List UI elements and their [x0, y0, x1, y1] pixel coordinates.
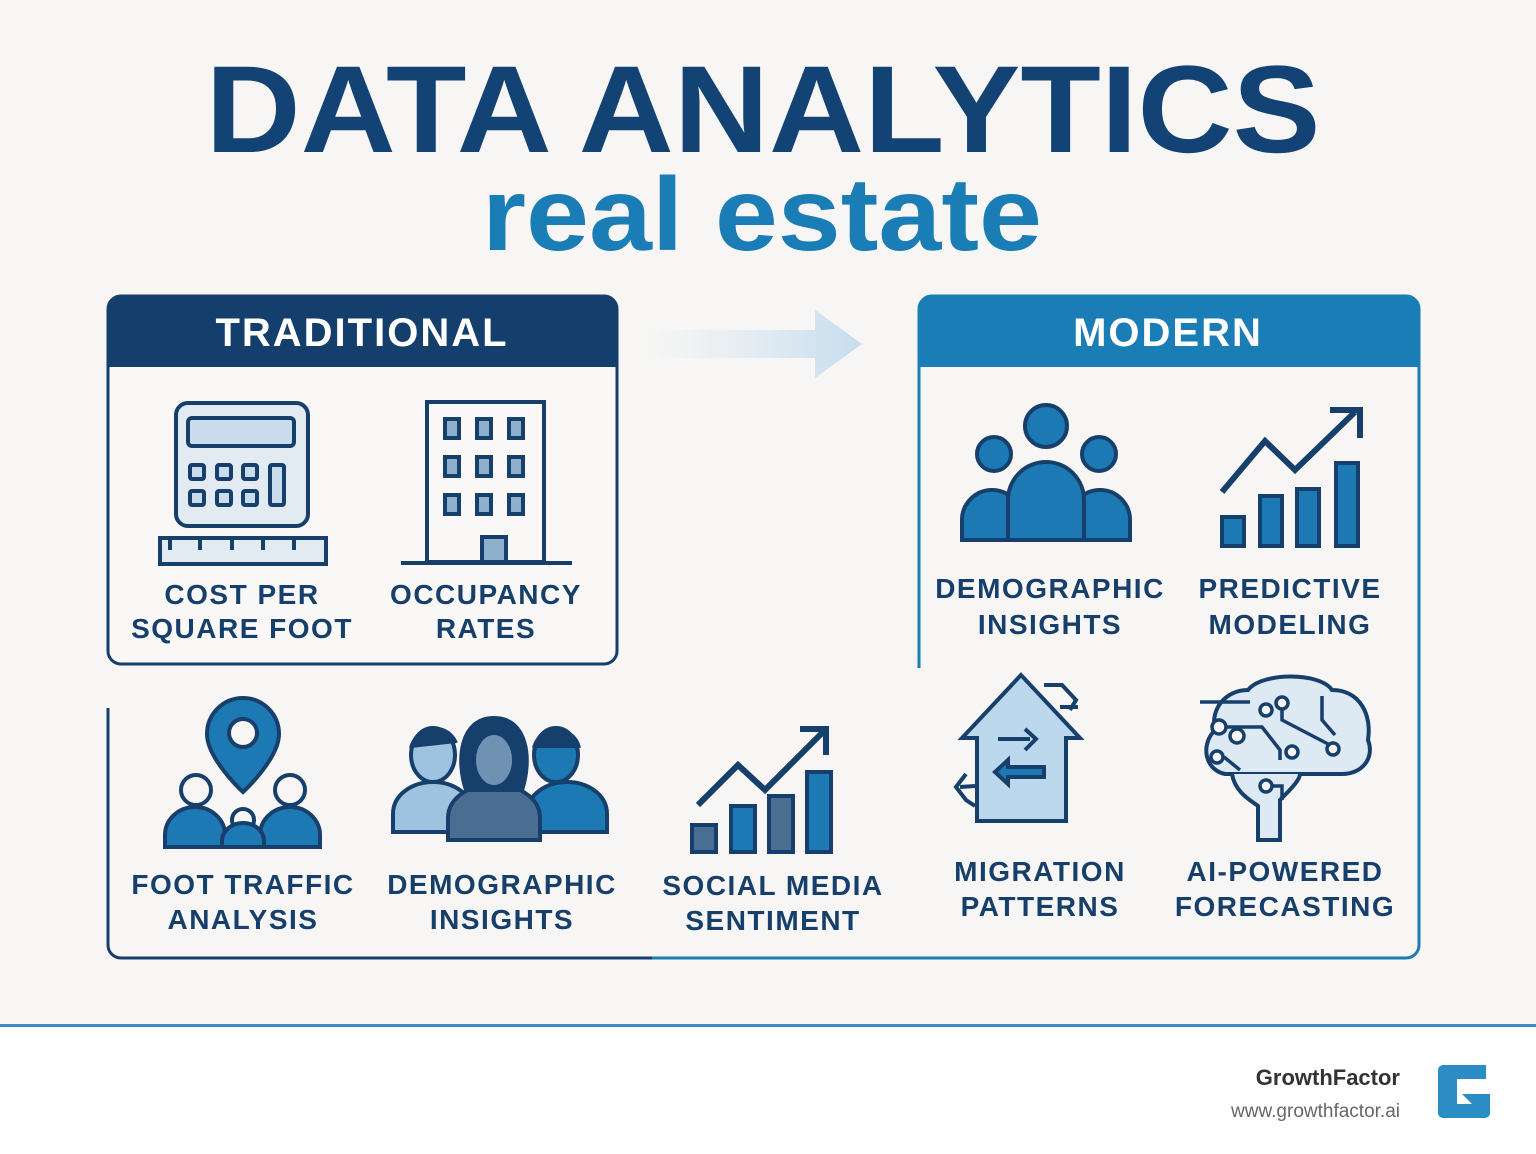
footer [0, 1024, 1536, 1122]
icon: foot traffic [165, 698, 320, 847]
label: occupancy rates: OCCUPANCY [390, 579, 582, 610]
icon: migration house [956, 675, 1080, 821]
label: demographic insights modern: DEMOGRAPHIC [935, 573, 1165, 604]
label: social media sentiment: SOCIAL MEDIA [662, 870, 884, 901]
label: predictive modeling: MODELING [1209, 609, 1371, 640]
label: demographic insights: INSIGHTS [430, 904, 574, 935]
title: DATA ANALYTICS [206, 41, 1320, 179]
brand text: GrowthFactor [1256, 1065, 1400, 1090]
label: social media sentiment: SENTIMENT [685, 905, 861, 936]
footer: www.growthfactor.ai [1230, 1101, 1400, 1122]
icon: logo [1438, 1065, 1490, 1118]
label: predictive modeling: PREDICTIVE [1198, 573, 1382, 604]
label: occupancy rates: RATES [436, 613, 536, 644]
label: cost per square foot: COST PER [164, 579, 320, 610]
label: cost per square foot: SQUARE FOOT [131, 613, 353, 644]
icon: demographic faces [393, 718, 607, 840]
label: migration patterns: PATTERNS [961, 891, 1119, 922]
label: ai-powered forecasting: AI-POWERED [1186, 856, 1384, 887]
label: foot traffic analysis: ANALYSIS [167, 904, 319, 935]
heading: modern: MODERN [1073, 311, 1263, 355]
icon: people group [962, 405, 1130, 540]
icon: calculator [160, 403, 326, 564]
panel: traditional [108, 296, 617, 664]
icon: social media chart [692, 729, 831, 852]
arrow [640, 310, 862, 378]
label: demographic insights modern: INSIGHTS [978, 609, 1122, 640]
title: real estate [482, 157, 1042, 273]
label: ai-powered forecasting: FORECASTING [1175, 891, 1395, 922]
panel: bottom traditional row [131, 698, 884, 936]
panel: modern [108, 296, 1419, 958]
label: migration patterns: MIGRATION [954, 856, 1126, 887]
icon: predictive chart [1222, 410, 1360, 546]
label: demographic insights: DEMOGRAPHIC [387, 869, 617, 900]
heading: traditional: TRADITIONAL [215, 311, 509, 355]
label: foot traffic analysis: FOOT TRAFFIC [131, 869, 355, 900]
title [206, 41, 1320, 273]
icon: building [401, 402, 572, 563]
icon: AI brain [1200, 676, 1370, 840]
